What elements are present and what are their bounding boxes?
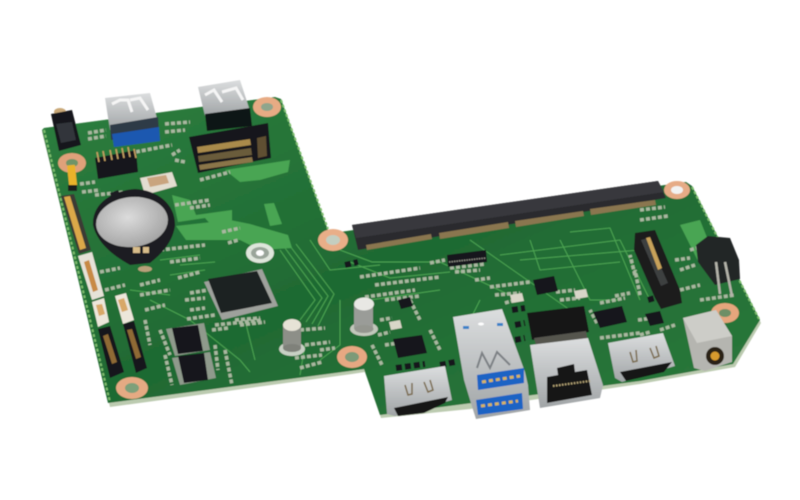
yellow jumper	[67, 165, 77, 191]
PCIe edge connector	[352, 181, 666, 250]
black board connectors	[98, 321, 147, 378]
HDMI port left	[384, 366, 452, 416]
DC power jack	[683, 310, 732, 371]
USB dual stack port	[453, 309, 530, 419]
vertical M.2 socket	[634, 230, 682, 309]
two SOP chips	[166, 323, 216, 385]
HDMI-style port rear	[198, 80, 252, 131]
two-pin black power header	[696, 236, 740, 296]
copper traces	[130, 228, 650, 375]
USB port rear	[105, 93, 160, 147]
small FFC connector	[447, 250, 487, 267]
small surface-mount components	[80, 122, 735, 385]
white connector strip	[78, 252, 104, 300]
RJ45 ethernet port	[530, 338, 603, 408]
board outline	[42, 97, 761, 418]
M.2 socket	[189, 123, 271, 173]
pin header	[95, 147, 138, 179]
crystal oscillators	[389, 289, 588, 330]
white connector	[140, 172, 177, 195]
HDMI port right	[608, 333, 675, 382]
standoff screw left	[279, 319, 305, 356]
standoff screw right	[350, 298, 378, 336]
coin cell battery	[93, 189, 175, 272]
copper mounting holes	[58, 97, 739, 399]
QFP main chip	[204, 269, 278, 320]
small white connectors	[92, 293, 134, 327]
small black chips	[393, 276, 664, 358]
barrel jack top-left	[51, 108, 81, 151]
light copper-pour patches	[172, 160, 720, 270]
large black magnetics block	[527, 306, 589, 345]
ring mount	[246, 243, 274, 263]
flat cable connector gold	[61, 194, 91, 254]
